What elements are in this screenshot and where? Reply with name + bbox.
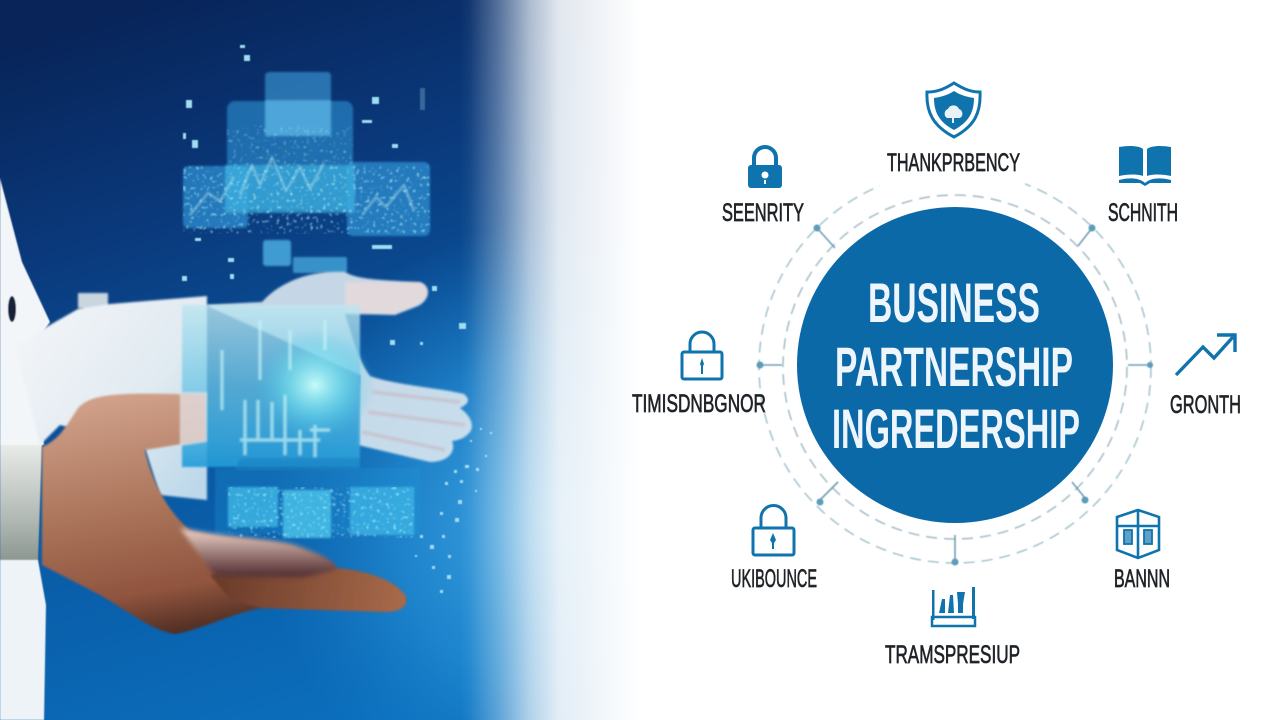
item: security (top left) <box>722 147 804 227</box>
item: left label <box>632 332 766 418</box>
item: bottom right label <box>1114 510 1170 593</box>
icon: open book <box>1119 146 1171 186</box>
item: transparency (top): THANKPRBENCY <box>887 149 1020 177</box>
item: security (top left): SEENRITY <box>722 199 804 227</box>
item: transparency (top) <box>887 83 1020 177</box>
hologram: data texture on lower panels <box>228 487 414 538</box>
icon: shield <box>927 83 980 137</box>
hologram: lower data panels <box>215 468 420 538</box>
white fade to right panel <box>460 0 1280 720</box>
icon: box building <box>1117 510 1159 558</box>
hologram: upper data panels <box>183 72 430 273</box>
item: bottom label: TRAMSPRESIUP <box>885 641 1020 669</box>
item: bottom left label: UKIBOUNCE <box>731 565 817 593</box>
icon: growth arrow <box>1176 335 1235 375</box>
item: book (top right): SCHNITH <box>1108 199 1178 227</box>
connector nodes <box>756 224 1153 566</box>
item: left label: TIMISDNBGNOR <box>632 390 766 418</box>
item: bottom label <box>885 587 1020 669</box>
title: three lines: INGREDERSHIP <box>832 397 1080 460</box>
hologram: data texture on upper panels <box>183 125 430 234</box>
coat sleeve <box>15 293 207 500</box>
icon: bar chart <box>932 587 975 626</box>
title: three lines: BUSINESS <box>868 271 1040 334</box>
hologram: central panel over hand <box>182 305 375 470</box>
central circle with title <box>797 207 1113 523</box>
item: bottom left label <box>731 505 817 593</box>
coat: body and lower cuff <box>0 178 50 720</box>
item: growth (right) <box>1170 335 1241 419</box>
item: growth (right): GRONTH <box>1170 391 1241 419</box>
blue photo background <box>0 0 660 720</box>
title: three lines: PARTNERSHIP <box>835 335 1073 398</box>
hologram: floating particles <box>182 45 492 593</box>
translucent upper hand <box>205 272 472 462</box>
item: bottom right label: BANNN <box>1114 565 1170 593</box>
icon: solid padlock <box>748 147 782 188</box>
icon: outlined padlock <box>682 332 722 379</box>
title: three lines <box>832 271 1080 460</box>
icon: outlined padlock <box>753 505 794 555</box>
dashed connector rings <box>759 166 1151 563</box>
item: book (top right) <box>1108 146 1178 227</box>
lower hand <box>42 392 406 634</box>
